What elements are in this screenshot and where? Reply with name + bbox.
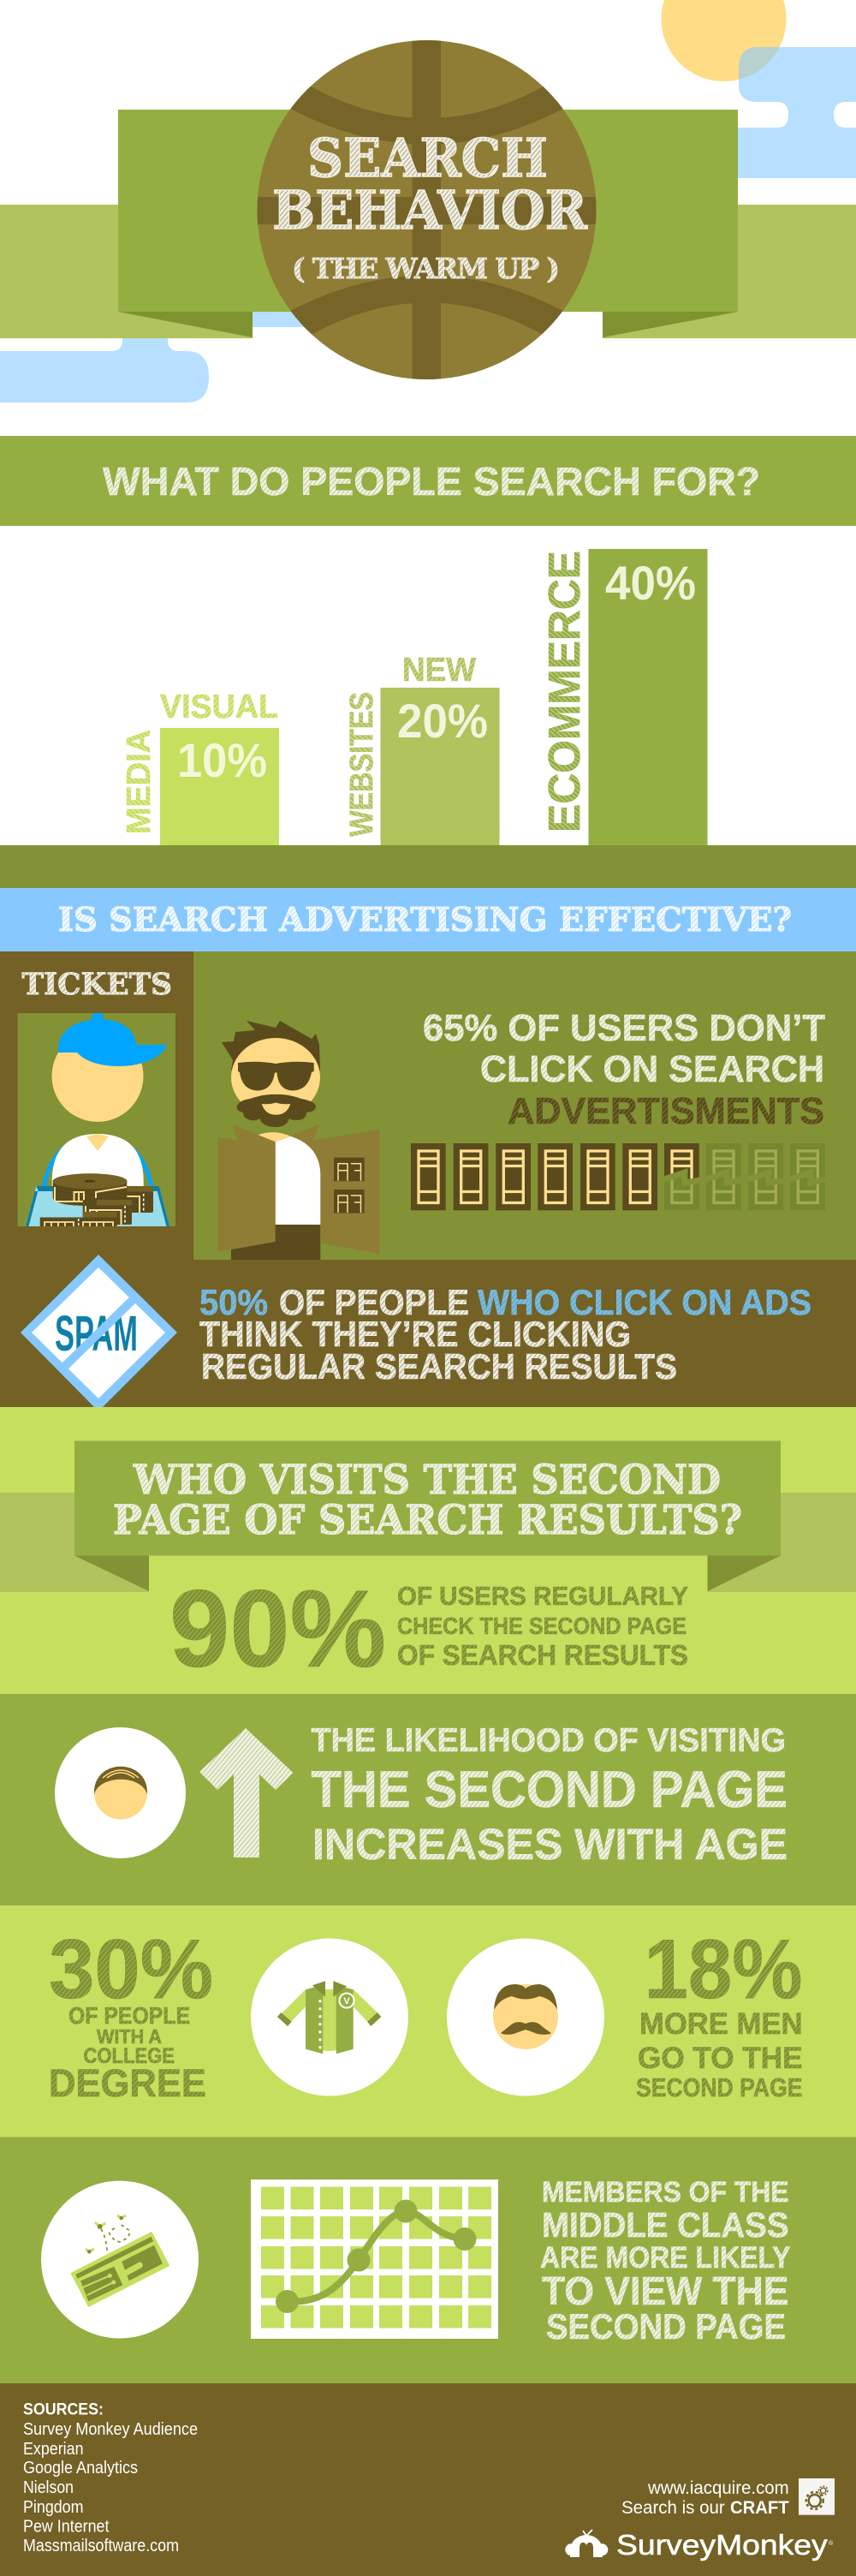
sources list: Nielson xyxy=(23,2478,74,2497)
stat: 18% more men: MORE MEN xyxy=(639,2007,803,2041)
stat: 90% of users xyxy=(169,1568,688,1690)
bar: new websites 20%: 20% xyxy=(397,694,488,748)
sun xyxy=(661,0,786,81)
icon: shirt xyxy=(251,1939,408,2096)
panel: spam xyxy=(0,1255,856,1411)
bar: visual media 10% xyxy=(121,689,279,845)
title text xyxy=(272,127,587,285)
stat: 30% college degree: 30% xyxy=(49,1922,213,2016)
credit: iAcquire: www.iacquire.com xyxy=(647,2478,789,2498)
bar: visual media 10%: VISUAL xyxy=(160,689,278,725)
stat: 30% college degree: OF PEOPLE xyxy=(68,2002,190,2029)
stat: 18% more men xyxy=(636,1922,803,2102)
bar: new websites 20%: WEBSITES xyxy=(344,692,380,837)
text: members of the middle class: MEMBERS OF THE xyxy=(542,2176,789,2209)
band: light green field xyxy=(0,205,856,338)
credit: iAcquire: CRAFT xyxy=(730,2498,789,2518)
text: members of the middle class: TO VIEW THE xyxy=(542,2269,789,2313)
panel: middle class xyxy=(0,2138,856,2383)
credit: iAcquire xyxy=(621,2478,789,2518)
title ribbon xyxy=(118,110,738,337)
stat: 18% more men: GO TO THE xyxy=(638,2042,803,2075)
icon: gears xyxy=(799,2478,835,2515)
section header: what do people search for: WHAT DO PEOPLE SEARCH FOR? xyxy=(103,459,760,504)
bar: new websites 20% xyxy=(344,652,500,845)
title text: ( THE WARM UP ) xyxy=(292,252,560,285)
section header: what do people search for xyxy=(0,436,856,526)
stat: 90% of users: OF SEARCH RESULTS xyxy=(397,1639,688,1671)
stat: 18% more men: SECOND PAGE xyxy=(636,2072,803,2102)
panel: likelihood increases with age xyxy=(0,1694,856,1905)
panel: tickets column: TICKETS xyxy=(22,967,172,1002)
bar: ecommerce 40%: ECOMMERCE xyxy=(540,551,590,832)
chart baseline band xyxy=(0,845,856,888)
bar: visual media 10%: MEDIA xyxy=(121,730,158,834)
panel: college degree and men xyxy=(0,1905,856,2138)
ribbon heading: WHO VISITS THE SECOND xyxy=(133,1457,721,1504)
panel background green xyxy=(193,951,856,1260)
stat text: 50% of people xyxy=(199,1282,811,1386)
panel: tickets column xyxy=(0,951,193,1260)
stat text: 50% of people: OF PEOPLE xyxy=(279,1282,469,1322)
title ball xyxy=(253,34,603,385)
footer xyxy=(0,2383,856,2576)
sources list xyxy=(23,2401,198,2555)
stat: 30% college degree xyxy=(49,1922,213,2105)
stat text: 50% of people: 50% xyxy=(199,1282,268,1322)
credit: iAcquire: Search is our xyxy=(621,2498,725,2518)
stat text: 65% of users: CLICK ON SEARCH xyxy=(480,1048,824,1090)
title text: BEHAVIOR xyxy=(272,179,587,242)
sources list: Survey Monkey Audience xyxy=(23,2420,198,2439)
text: members of the middle class: SECOND PAGE xyxy=(546,2306,786,2346)
icon: man with sunglasses and jacket xyxy=(218,1021,379,1260)
icon: shirt: V xyxy=(343,1996,350,2007)
arrow: up xyxy=(199,1728,293,1857)
hero section xyxy=(0,0,856,436)
section header: is search advertising effective xyxy=(0,888,856,951)
stat text: 50% of people: WHO CLICK ON ADS xyxy=(478,1282,811,1322)
icon: older man's face xyxy=(55,1727,186,1858)
ribbon heading xyxy=(74,1440,781,1591)
text: likelihood statement: THE SECOND PAGE xyxy=(312,1761,788,1818)
stat text: 65% of users: 65% OF USERS DON’T xyxy=(423,1007,825,1049)
stat: 30% college degree: WITH A xyxy=(97,2025,162,2048)
pictogram: ten tickets, 65 percent xyxy=(411,1143,825,1210)
stat text: 65% of users: ADVERTISMENTS xyxy=(508,1090,824,1132)
line chart: grid with rising line xyxy=(251,2179,498,2339)
stat: 90% of users: OF USERS REGULARLY xyxy=(397,1581,688,1611)
cloud: top right xyxy=(738,47,856,178)
stat: 90% of users: 90% xyxy=(169,1568,386,1690)
stat: 90% of users: CHECK THE SECOND PAGE xyxy=(397,1613,687,1639)
icon: man with moustache xyxy=(447,1939,604,2096)
bar: new websites 20%: NEW xyxy=(402,652,476,689)
stat: 30% college degree: DEGREE xyxy=(49,2061,206,2105)
icon: wallet with flies xyxy=(41,2180,199,2338)
panel: who visits the second page xyxy=(0,1407,856,1694)
stat text: 50% of people: THINK THEY’RE CLICKING xyxy=(199,1314,631,1354)
sources list: Google Analytics xyxy=(23,2459,138,2478)
cloud: bottom left xyxy=(0,338,209,402)
background: white sky xyxy=(0,0,856,436)
bar: visual media 10%: 10% xyxy=(177,733,267,787)
icon: ticket seller xyxy=(26,1012,169,1228)
panel: advertising xyxy=(0,951,856,1260)
logo: SurveyMonkey: SurveyMonkey xyxy=(616,2529,828,2561)
section header: is search advertising effective: IS SEARCH ADVERTISING EFFECTIVE? xyxy=(58,900,792,939)
bar: ecommerce 40% xyxy=(540,549,707,845)
stat text: 50% of people: REGULAR SEARCH RESULTS xyxy=(201,1346,677,1386)
logo: SurveyMonkey xyxy=(565,2529,834,2561)
icon: spam diamond xyxy=(21,1255,177,1411)
stat: 18% more men: 18% xyxy=(644,1922,803,2016)
icon: spam diamond: SPAM xyxy=(55,1306,138,1362)
sources list: Pew Internet xyxy=(23,2518,110,2537)
sources list: Experian xyxy=(23,2440,84,2459)
stat text: 65% of users xyxy=(423,1007,825,1132)
bar: ecommerce 40%: 40% xyxy=(605,556,696,610)
text: members of the middle class xyxy=(540,2176,791,2346)
ribbon heading: PAGE OF SEARCH RESULTS? xyxy=(113,1497,742,1544)
sources list: Massmailsoftware.com xyxy=(23,2537,179,2555)
logo: SurveyMonkey: ® xyxy=(829,2540,834,2547)
bar chart: search categories xyxy=(121,549,707,845)
sources list: Pingdom xyxy=(23,2498,84,2517)
text: members of the middle class: MIDDLE CLASS xyxy=(542,2205,789,2245)
text: members of the middle class: ARE MORE LIKELY xyxy=(540,2241,791,2275)
cloud: behind ribbon xyxy=(253,308,330,327)
text: likelihood statement: INCREASES WITH AGE xyxy=(312,1820,788,1869)
stat: 30% college degree: COLLEGE xyxy=(84,2044,175,2068)
title text: SEARCH xyxy=(307,127,548,189)
sources list: SOURCES: xyxy=(23,2401,104,2418)
text: likelihood statement: THE LIKELIHOOD OF VISITING xyxy=(312,1722,786,1759)
text: likelihood statement xyxy=(312,1722,788,1869)
